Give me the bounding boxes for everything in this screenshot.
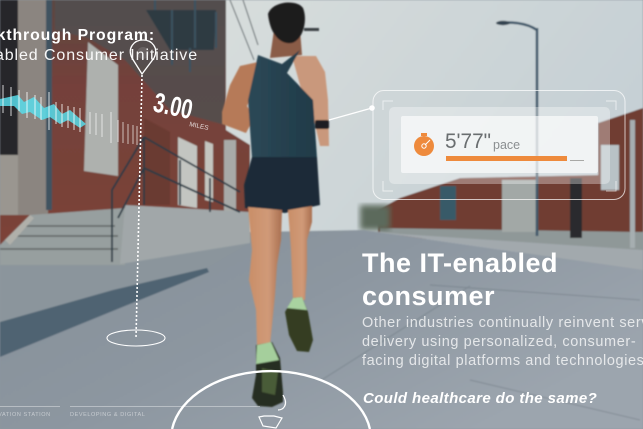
footer strip text — [0, 406, 260, 418]
body copy: delivery using personalized, consumer- — [362, 334, 636, 350]
card outer frame — [373, 90, 625, 200]
pace bar — [446, 156, 567, 161]
heading: The IT-enabled — [362, 248, 558, 278]
clapboard column — [18, 0, 48, 215]
card translucent layer — [389, 107, 610, 184]
shoe front — [252, 342, 283, 407]
HUD: sound wave — [0, 85, 137, 145]
door — [144, 118, 170, 205]
road cracks — [320, 285, 640, 420]
runner arm left — [222, 62, 258, 133]
footer label two: DEVELOPING & DIGITAL — [70, 412, 145, 418]
runner singlet — [248, 50, 317, 158]
shoe rear — [285, 297, 313, 352]
curb — [0, 268, 209, 357]
lamp post — [498, 23, 537, 236]
pace value: 5'77" — [445, 130, 491, 153]
runner neck — [270, 30, 302, 58]
right low buildings — [378, 108, 643, 252]
slide header — [0, 27, 198, 64]
connector line to watch — [329, 108, 372, 120]
pace bar remainder — [570, 160, 584, 161]
heading line two: consumer — [362, 281, 495, 311]
body copy: facing digital platforms and technologies — [362, 353, 643, 369]
runner arm right — [292, 56, 329, 146]
right sidewalk — [363, 230, 643, 270]
foot marker — [259, 416, 282, 428]
fire escape — [146, 10, 216, 50]
sky — [0, 0, 643, 252]
pace label: pace — [493, 138, 520, 152]
runner head — [268, 2, 305, 43]
road — [0, 230, 643, 429]
large ring — [172, 371, 370, 429]
frame corners — [383, 101, 616, 191]
concrete wall — [120, 205, 250, 264]
grey wall upper — [55, 0, 226, 125]
closing question: Could healthcare do the same? — [363, 390, 597, 407]
distance unit: MILES — [189, 121, 210, 132]
wires — [230, 0, 258, 60]
left building — [0, 0, 250, 262]
connector dot — [369, 105, 375, 111]
runner — [222, 2, 329, 407]
railing — [112, 137, 240, 262]
location pin — [130, 40, 156, 74]
icon: stopwatch — [414, 133, 434, 156]
runner right leg — [288, 206, 312, 300]
ground marker ellipse — [107, 330, 165, 346]
wave bars — [3, 85, 80, 132]
dotted line from pin to ground — [136, 75, 142, 338]
text block: the IT-enabled consumer — [362, 248, 643, 407]
cyan wave — [0, 95, 86, 128]
pin outline — [130, 40, 156, 74]
ground ring around foot — [172, 371, 370, 429]
windows — [84, 42, 118, 176]
watch — [315, 120, 329, 129]
distance value: 3.00 — [151, 88, 195, 126]
steps — [0, 208, 125, 265]
body copy — [362, 315, 643, 369]
card inner layer — [401, 116, 598, 173]
runner left leg — [248, 207, 282, 345]
pace card — [329, 90, 625, 200]
distance readout — [151, 88, 210, 132]
runner shorts — [244, 157, 320, 213]
left sidewalk — [0, 232, 265, 325]
